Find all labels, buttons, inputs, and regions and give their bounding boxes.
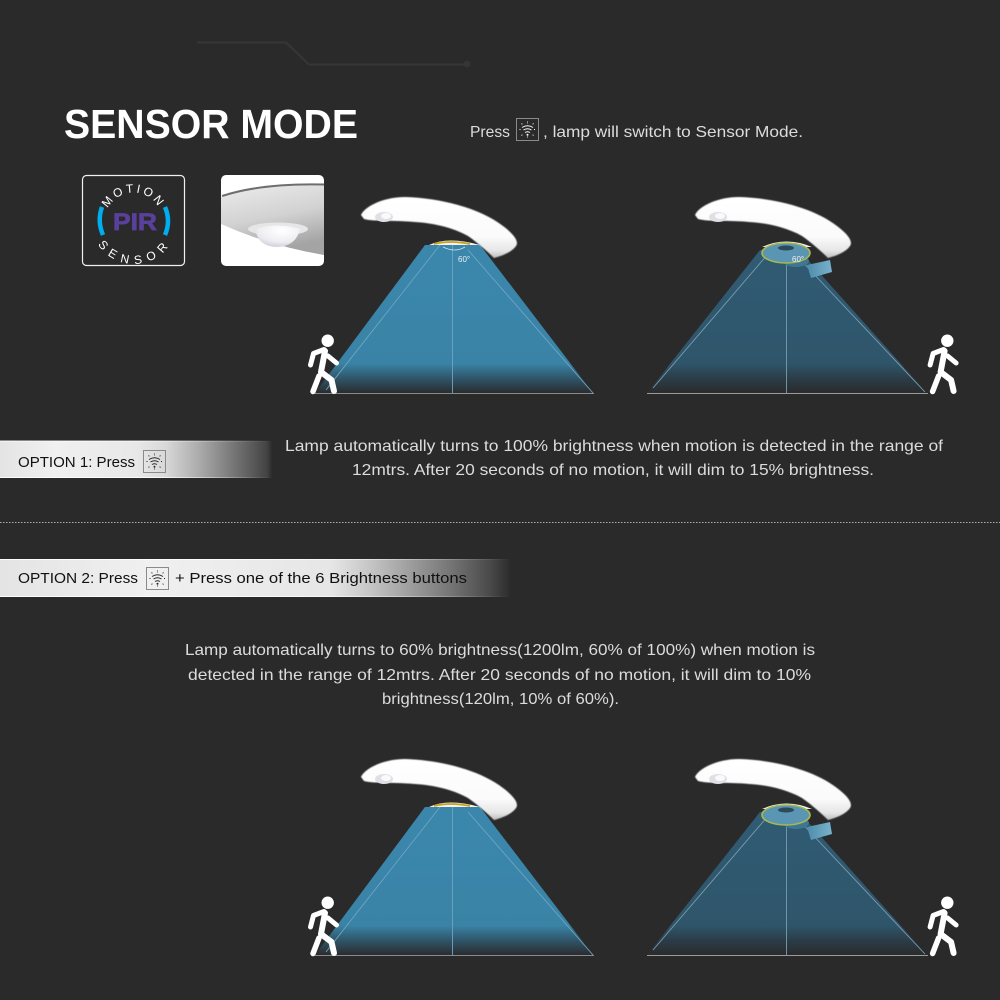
icon: walking person — [930, 334, 956, 392]
icon: walking person — [310, 896, 336, 954]
icon: walking person — [930, 896, 956, 954]
intro text with button icon: , lamp will switch to Sensor Mode. — [543, 124, 803, 141]
label: 60 degrees: 60° — [792, 255, 804, 264]
bar: option 1 — [0, 440, 272, 478]
text block: option 1 description: 12mtrs. After 20 seconds of no motion, it will dim to 15% brightness. — [352, 462, 874, 479]
text block: option 2 description: detected in the range of 12mtrs. After 20 seconds of no motion, it will dim to 10% — [188, 667, 811, 684]
icon: walking person — [310, 334, 336, 392]
diagram: detection cone left, option 2 — [310, 759, 594, 956]
photo: sensor close-up — [221, 175, 324, 266]
diagram: detection cone right, option 1 — [647, 197, 956, 394]
text block: option 2 description — [185, 642, 815, 708]
diagram: detection cone left, option 1 — [310, 197, 594, 394]
text block: option 1 description: Lamp automatically turns to 100% brightness when motion is detected in the range of — [285, 438, 944, 455]
badge: PIR motion sensor: SENSOR — [99, 240, 168, 264]
badge: PIR motion sensor: PIR — [113, 209, 157, 236]
badge: PIR motion sensor: MOTION — [101, 184, 164, 208]
text block: option 1 description — [285, 438, 944, 479]
bar: option 2: OPTION 2: Press — [18, 571, 138, 587]
title: SENSOR MODE — [64, 101, 358, 147]
text block: option 2 description: brightness(120lm, 10% of 60%). — [382, 691, 619, 708]
label: 60 degrees: 60° — [458, 255, 470, 264]
bar: option 1: OPTION 1: Press — [18, 455, 135, 471]
text block: option 2 description: Lamp automatically turns to 60% brightness(1200lm, 60% of 100%) when motion is — [185, 642, 815, 659]
intro text with button icon — [470, 118, 803, 141]
bar: option 2: + Press one of the 6 Brightness buttons — [175, 571, 467, 587]
bar: option 2 — [0, 559, 510, 597]
badge: PIR motion sensor — [82, 174, 186, 266]
intro text with button icon: Press — [470, 124, 510, 141]
diagram: detection cone right, option 2 — [647, 759, 956, 956]
decorative top line — [197, 42, 470, 68]
